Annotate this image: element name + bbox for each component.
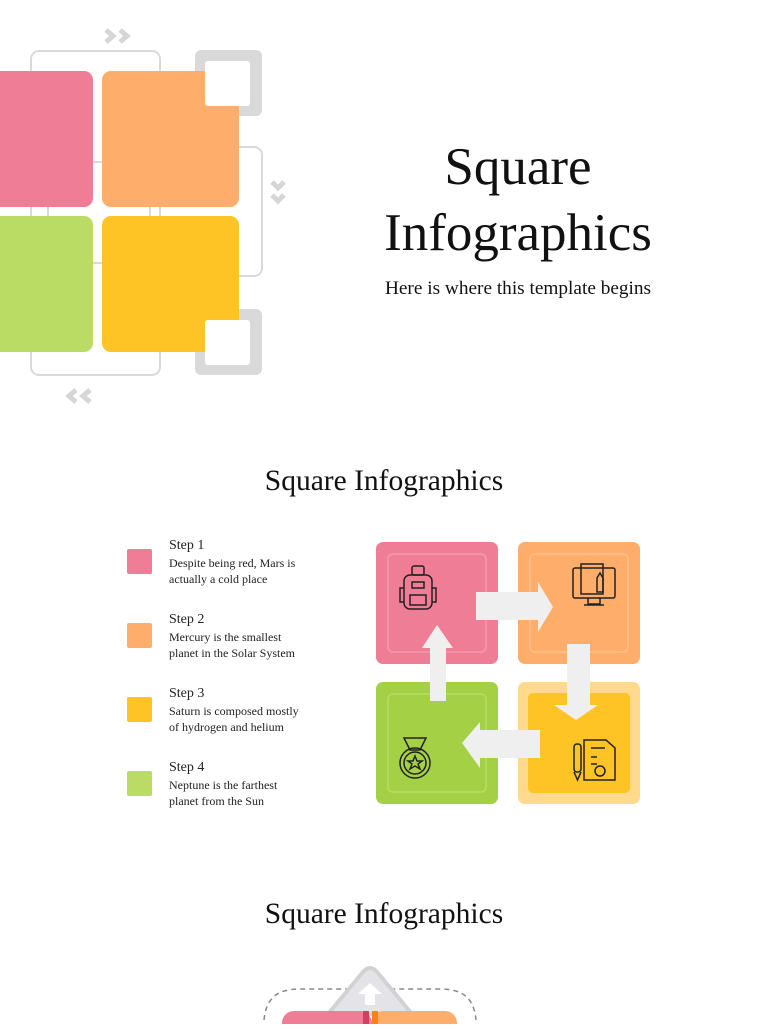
step 1: Step 1 [169, 538, 204, 553]
step 4: Step 4 [169, 760, 204, 775]
process diagram [376, 542, 640, 804]
step 3: Saturn is composed mostly [169, 704, 299, 718]
step 1 [127, 538, 295, 586]
step 3: Step 3 [169, 686, 204, 701]
step 4: Neptune is the farthest [169, 778, 277, 792]
step 2: Step 2 [169, 612, 204, 627]
hero graphic [0, 28, 286, 404]
tile: yellow [518, 682, 640, 804]
step 2 [127, 612, 295, 660]
icon: exam paper [574, 740, 615, 780]
hero subtitle: Here is where this template begins [385, 278, 651, 299]
hero title [384, 138, 652, 262]
hero title: Square [444, 138, 592, 196]
arrow right [476, 582, 553, 632]
section 2 heading: Square Infographics [265, 465, 503, 497]
arrow down [554, 644, 598, 720]
legend [127, 538, 299, 808]
step 4: planet from the Sun [169, 794, 264, 808]
step 3 [127, 686, 299, 734]
hero title: Infographics [384, 204, 652, 262]
step 1: Despite being red, Mars is [169, 556, 295, 570]
arrow left [462, 722, 540, 768]
step 3: of hydrogen and helium [169, 720, 284, 734]
step 1: actually a cold place [169, 572, 267, 586]
section 3 heading: Square Infographics [265, 898, 503, 930]
icon: computer [573, 564, 615, 605]
step 4 [127, 760, 278, 808]
arrow up [422, 625, 453, 701]
icon: medal [400, 738, 430, 778]
icon: backpack [400, 566, 436, 609]
bottom diagram (partial) [263, 966, 477, 1024]
tile: green [376, 682, 498, 804]
step 2: Mercury is the smallest [169, 630, 281, 644]
tile: pink [376, 542, 498, 664]
step 2: planet in the Solar System [169, 646, 295, 660]
tile: orange [518, 542, 640, 664]
